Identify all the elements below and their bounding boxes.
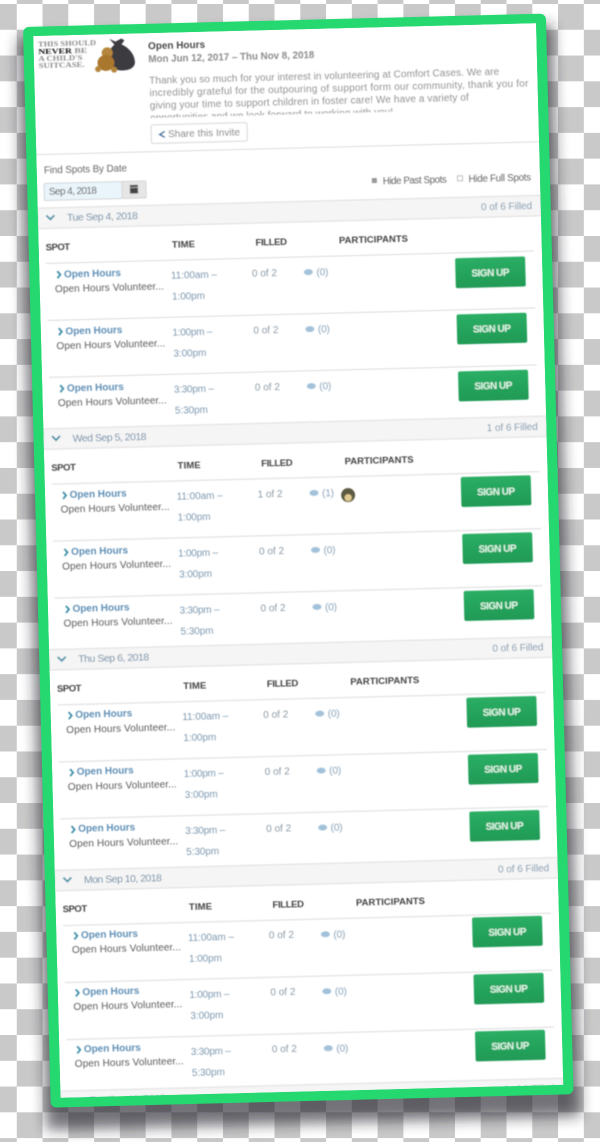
row: 3:30pm: 0 of 2 xyxy=(255,382,280,394)
share button xyxy=(151,123,247,144)
row: 3:30pm: 5:30pm xyxy=(180,626,214,637)
row: 11:00am: 1:00pm xyxy=(189,953,222,965)
row: 11:00am, one participant: 1 of 2 xyxy=(257,489,283,500)
table header: FILLED xyxy=(267,678,299,690)
date input xyxy=(44,181,146,201)
row: 1:00pm xyxy=(61,532,533,583)
date bar: Thu Sep 6, 2018 xyxy=(78,652,150,665)
row: 11:00am, one participant: (1) xyxy=(322,488,334,499)
row: 1:00pm: Open Hours Volunteer... xyxy=(62,559,171,572)
row: 1:00pm: Open Hours Volunteer... xyxy=(73,999,182,1013)
logo text: SUITCASE. xyxy=(38,60,85,70)
row: 11:00am, one participant: Open Hours xyxy=(69,488,127,501)
row: 1:00pm: 1:00pm – xyxy=(178,547,219,559)
row: 11:00am: 0 of 2 xyxy=(269,930,294,941)
row: 11:00am: Open Hours Volunteer... xyxy=(66,722,175,736)
row: 3:30pm xyxy=(57,370,529,420)
table header xyxy=(46,234,408,252)
row: 1:00pm: 3:00pm xyxy=(173,348,207,360)
row: 11:00am: (0) xyxy=(328,709,340,720)
logo text: THIS SHOULD xyxy=(38,38,97,49)
row: 1:00pm xyxy=(56,313,527,363)
event description: incredibly grateful for the outpouring of support form our community, thank you for xyxy=(149,79,529,99)
row: 11:00am, one participant: 1:00pm xyxy=(178,512,211,523)
date bar: 0 of 6 Filled xyxy=(498,863,549,875)
icon: share xyxy=(160,131,165,138)
row: 11:00am: (0) xyxy=(316,267,329,279)
logo text: NEVER BE xyxy=(38,46,87,56)
row: 1:00pm xyxy=(67,753,539,804)
row: 1:00pm: SIGN UP xyxy=(473,324,511,336)
table header: FILLED xyxy=(261,458,293,469)
table header: FILLED xyxy=(272,899,304,911)
row: 1:00pm: (0) xyxy=(318,324,330,336)
row: 1:00pm: Open Hours xyxy=(82,986,140,998)
row: 11:00am: Open Hours xyxy=(64,268,122,280)
section: Tue Sep 11, 2018 (cut off): Tue Sep 11, 2018 xyxy=(89,1093,166,1107)
row: 3:30pm xyxy=(69,810,540,861)
row: 11:00am: Open Hours Volunteer... xyxy=(55,282,164,295)
row: 1:00pm: SIGN UP xyxy=(478,543,517,555)
row: 3:30pm xyxy=(63,589,535,640)
table header: PARTICIPANTS xyxy=(350,675,419,688)
table header: SPOT xyxy=(57,683,82,695)
row: 1:00pm: 0 of 2 xyxy=(270,987,296,998)
table header: PARTICIPANTS xyxy=(345,454,414,467)
section: Thu Sep 6, 2018 xyxy=(49,637,557,862)
date bar xyxy=(55,857,558,891)
row: 3:30pm: 5:30pm xyxy=(175,405,208,417)
row: 3:30pm: 3:30pm – xyxy=(174,384,214,396)
row: 3:30pm: 0 of 2 xyxy=(266,823,292,835)
table header xyxy=(51,456,414,472)
table header: SPOT xyxy=(51,462,76,474)
section: Wed Sep 5, 2018 xyxy=(43,416,552,641)
icon: calendar xyxy=(130,185,138,194)
row: 11:00am, one participant: 11:00am – xyxy=(176,490,223,503)
event title: Open Hours xyxy=(148,39,205,52)
row: 1:00pm: 3:00pm xyxy=(190,1010,224,1022)
row: 11:00am: 11:00am – xyxy=(188,932,234,944)
row: 11:00am: 0 of 2 xyxy=(252,268,277,280)
table header: SPOT xyxy=(63,904,87,915)
table header: TIME xyxy=(183,681,206,692)
row: 3:30pm: 5:30pm xyxy=(186,846,219,858)
row: 3:30pm: SIGN UP xyxy=(480,600,518,612)
row: 11:00am xyxy=(54,256,526,306)
hide past spots checkbox: Hide Past Spots xyxy=(383,175,447,187)
row: 3:30pm: Open Hours xyxy=(72,602,130,615)
row: 3:30pm: (0) xyxy=(331,823,343,834)
row: 1:00pm: Open Hours Volunteer... xyxy=(56,339,166,352)
date bar: Tue Sep 4, 2018 xyxy=(67,210,138,224)
row: 3:30pm: Open Hours xyxy=(67,382,124,394)
participant avatar xyxy=(341,488,355,502)
row: 1:00pm: 0 of 2 xyxy=(253,325,279,337)
table header: TIME xyxy=(172,239,195,251)
row: 11:00am: SIGN UP xyxy=(483,707,521,719)
row: 1:00pm: 0 of 2 xyxy=(259,546,285,557)
row: 1:00pm: 1:00pm – xyxy=(189,989,230,1001)
date bar: 0 of 6 Filled xyxy=(481,201,532,213)
date bar xyxy=(49,637,552,670)
date bar: Mon Sep 10, 2018 xyxy=(84,872,162,886)
row: 3:30pm: Open Hours xyxy=(78,822,136,835)
event description: opportunities and we look forward to working with you! xyxy=(150,107,393,124)
row: 3:30pm: SIGN UP xyxy=(474,381,513,393)
row: 1:00pm xyxy=(73,973,544,1025)
row: 1:00pm: Open Hours Volunteer... xyxy=(68,779,177,793)
date bar xyxy=(38,195,541,229)
logo text xyxy=(38,38,97,70)
section: Tue Sep 4, 2018 xyxy=(38,195,546,420)
row: 1:00pm: 1:00pm – xyxy=(172,327,213,339)
row: 1:00pm: 3:00pm xyxy=(185,789,218,801)
row: 11:00am: 11:00am – xyxy=(182,711,229,723)
row: 11:00am, one participant: Open Hours Volunteer... xyxy=(60,502,170,515)
row: 1:00pm: Open Hours xyxy=(71,545,129,558)
row: 3:30pm: 5:30pm xyxy=(192,1067,225,1079)
row: 3:30pm: (0) xyxy=(325,602,337,613)
row: 1:00pm: (0) xyxy=(323,545,336,556)
row: 1:00pm: (0) xyxy=(335,986,347,998)
logo text: A CHILD'S xyxy=(38,53,83,63)
row: 11:00am, one participant xyxy=(60,475,532,526)
table header xyxy=(62,896,426,913)
table header xyxy=(56,676,420,692)
table header: SPOT xyxy=(46,242,70,253)
row: 11:00am, one participant: SIGN UP xyxy=(477,486,516,498)
row: 3:30pm: 0 of 2 xyxy=(260,603,286,614)
row: 11:00am xyxy=(71,916,543,968)
table header: TIME xyxy=(189,901,212,913)
row: 11:00am: Open Hours xyxy=(75,709,133,721)
row: 3:30pm: SIGN UP xyxy=(486,821,524,833)
date bar: 0 of 6 Filled xyxy=(492,642,544,655)
row: 1:00pm: SIGN UP xyxy=(490,984,528,996)
row: 11:00am: SIGN UP xyxy=(488,927,527,939)
row: 3:30pm: 3:30pm – xyxy=(185,825,226,837)
row: 1:00pm: 1:00pm – xyxy=(184,768,224,780)
event description: giving your time to support children in foster care! We have a variety of xyxy=(150,93,469,112)
row: 1:00pm: 0 of 2 xyxy=(265,766,290,778)
row: 3:30pm: Open Hours Volunteer... xyxy=(69,836,178,850)
row: 3:30pm: 0 of 2 xyxy=(272,1044,297,1055)
row: 11:00am: 0 of 2 xyxy=(263,710,289,721)
section: Mon Sep 10, 2018 xyxy=(55,857,563,1082)
event description xyxy=(148,68,529,118)
row: 11:00am: Open Hours xyxy=(81,929,138,941)
section: Tue Sep 11, 2018 (cut off) xyxy=(60,1078,564,1098)
row: 3:30pm: SIGN UP xyxy=(491,1041,530,1053)
row: 3:30pm: 3:30pm – xyxy=(179,604,220,616)
table header: FILLED xyxy=(255,237,287,249)
row: 11:00am: (0) xyxy=(333,929,346,941)
date bar: Wed Sep 5, 2018 xyxy=(72,431,147,445)
row: 1:00pm: (0) xyxy=(329,766,341,777)
hide full spots checkbox: Hide Full Spots xyxy=(468,173,531,185)
row: 3:30pm: Open Hours xyxy=(84,1043,141,1055)
row: 11:00am: 11:00am – xyxy=(171,270,218,282)
event description: Thank you so much for your interest in volunteering at Comfort Cases. We are xyxy=(149,67,500,87)
table header: PARTICIPANTS xyxy=(339,234,408,246)
row: 3:30pm: 3:30pm – xyxy=(191,1046,231,1058)
row: 1:00pm: Open Hours xyxy=(65,325,123,337)
section: Tue Sep 11, 2018 (cut off): 0 of 6 Filled xyxy=(504,1084,555,1096)
row: 11:00am: 1:00pm xyxy=(172,291,205,303)
row: 3:30pm: (0) xyxy=(319,381,331,393)
row: 3:30pm: Open Hours Volunteer... xyxy=(75,1056,184,1070)
event dates: Mon Jun 12, 2017 – Thu Nov 8, 2018 xyxy=(148,50,315,65)
row: 1:00pm: SIGN UP xyxy=(484,764,523,776)
row: 3:30pm: Open Hours Volunteer... xyxy=(63,616,173,629)
table header: TIME xyxy=(177,460,201,471)
row: 11:00am: SIGN UP xyxy=(471,268,510,280)
date bar xyxy=(43,416,547,449)
row: 3:30pm: Open Hours Volunteer... xyxy=(58,396,167,409)
row: 3:30pm: (0) xyxy=(336,1043,348,1055)
row: 1:00pm: Open Hours xyxy=(77,765,134,778)
icon: trash bag and teddy bear xyxy=(94,38,135,73)
row: 3:30pm xyxy=(74,1030,546,1082)
row: 11:00am: 1:00pm xyxy=(183,732,216,744)
date input: Sep 4, 2018 xyxy=(49,186,98,198)
table header: PARTICIPANTS xyxy=(356,896,425,909)
date bar: 1 of 6 Filled xyxy=(487,422,538,434)
row: 1:00pm: 3:00pm xyxy=(179,569,212,580)
row: 11:00am: Open Hours Volunteer... xyxy=(72,942,181,956)
date filter label: Find Spots By Date xyxy=(44,163,128,177)
share button: Share this Invite xyxy=(168,127,241,140)
row: 11:00am xyxy=(66,696,537,747)
